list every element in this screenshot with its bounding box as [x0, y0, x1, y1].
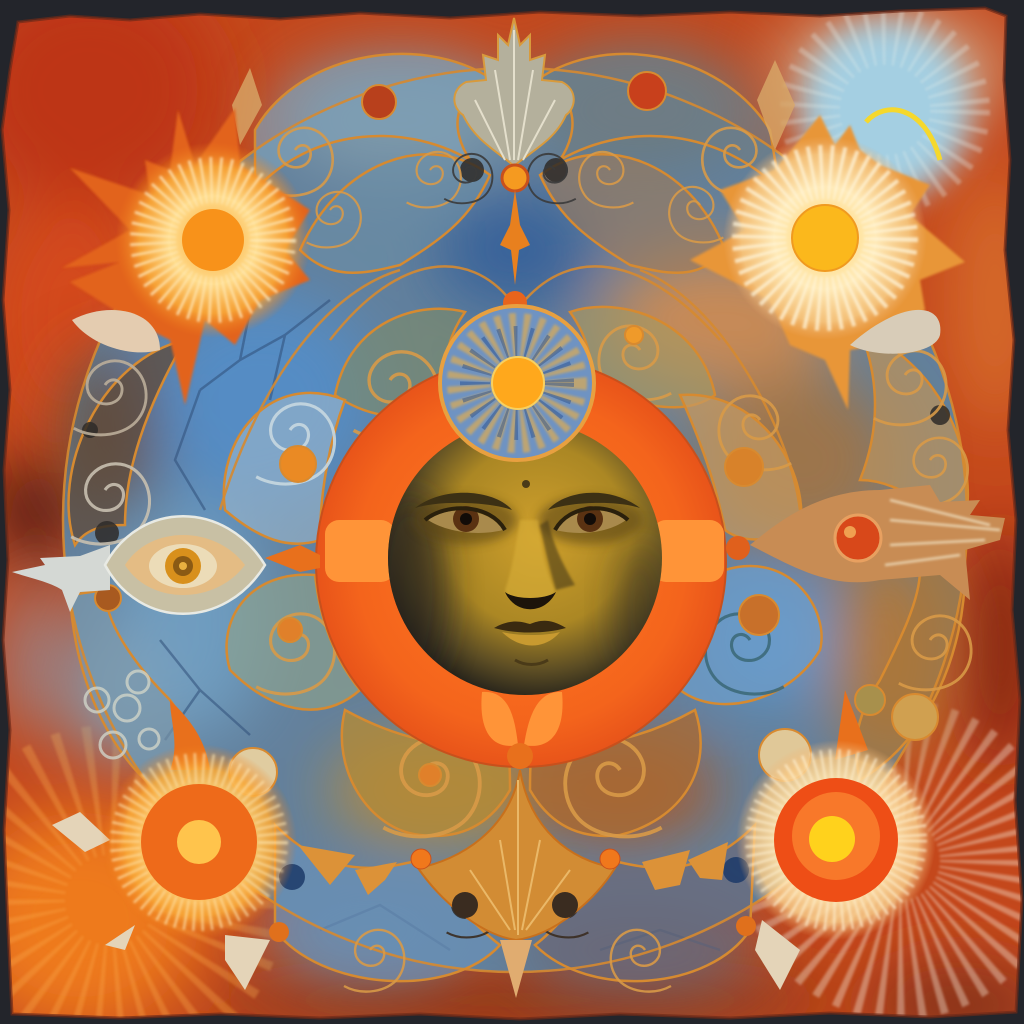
gold ornamental rings: [63, 68, 967, 972]
mouth: [494, 621, 566, 664]
left eye ornament: [12, 516, 320, 614]
top crest feather: [454, 18, 574, 315]
sun face: [388, 432, 662, 695]
medallion sun: [440, 306, 594, 460]
disc crack veins: [160, 300, 720, 950]
sun bottom right: [736, 690, 936, 990]
nose: [505, 520, 575, 609]
top right pale blue burst: [800, 20, 970, 200]
feather tufts upper corners: [232, 60, 795, 150]
sun top left: [62, 108, 311, 405]
brow and eye sockets: [415, 480, 640, 533]
bubble chain lower left: [85, 671, 159, 758]
small orbs: [95, 72, 938, 796]
sun bottom left: [52, 700, 297, 990]
small gold birds: [298, 842, 728, 895]
central orange disc: [316, 357, 726, 767]
swirl ornaments: [71, 128, 971, 992]
sun top right: [690, 115, 965, 410]
translucent lobes: [69, 54, 968, 981]
right feather ornament: [726, 485, 1005, 600]
bottom central leaf: [269, 743, 756, 998]
bottom corner rays: [0, 760, 1000, 1010]
dark swirl pits: [82, 158, 950, 919]
